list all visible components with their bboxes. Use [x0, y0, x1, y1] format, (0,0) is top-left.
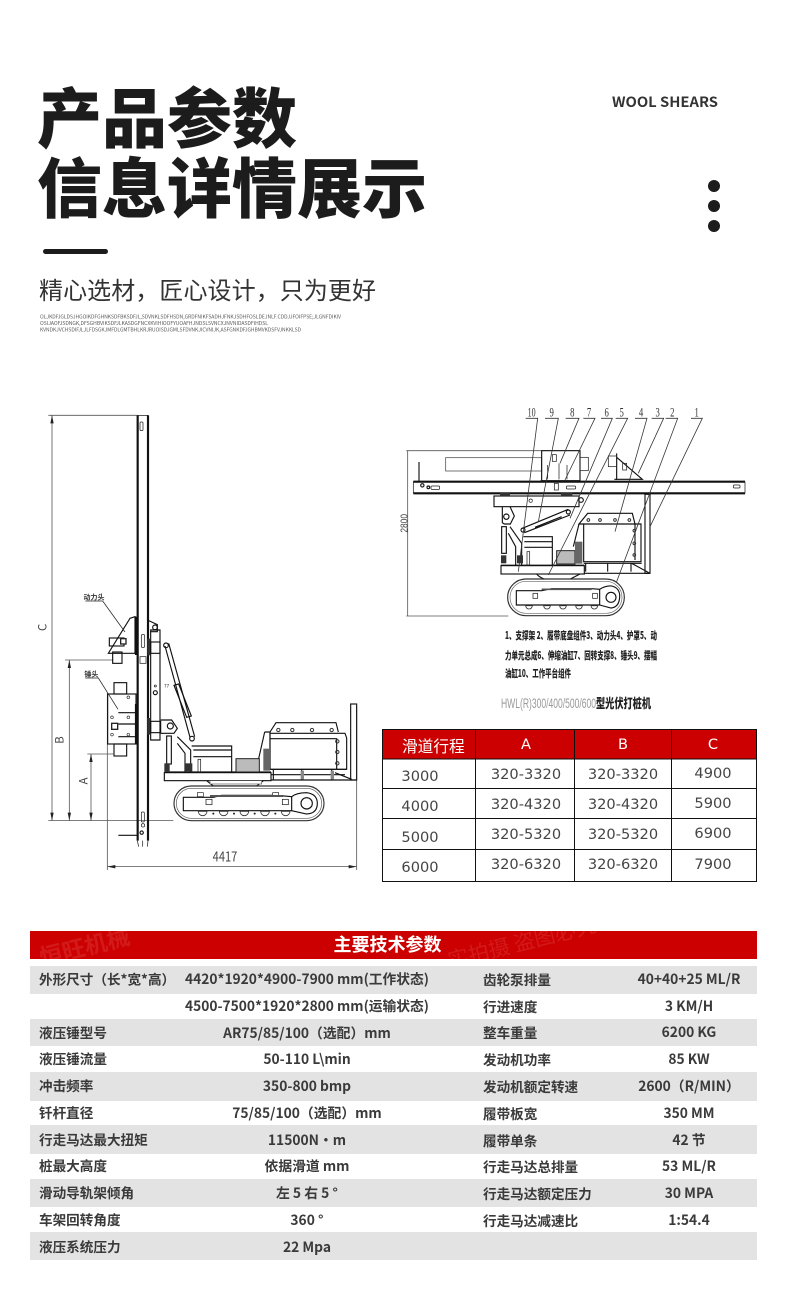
- dimension lines: C: [35, 624, 51, 631]
- fine print: OSIJAOFJSDNGK,DFSGHBVIKSDFJLKASDGFNCXKVIHIOOFYUOAFHJNDSLSVNCXJNVNIDASDFIHDSL: [40, 320, 268, 327]
- table values: 320-3320: [491, 766, 561, 783]
- specs header: [30, 931, 757, 959]
- specs left column: 4420*1920*4900-7900 mm(工作状态): [185, 968, 429, 988]
- specs left column: 液压锤型号: [39, 1022, 107, 1042]
- specs header: 主要技术参数: [334, 931, 442, 957]
- engine guard: [573, 494, 650, 573]
- support arm and cylinder: 77: [164, 683, 170, 689]
- table values: 320-6320: [588, 856, 658, 873]
- specs header: 恒旺机械: [35, 918, 133, 973]
- top view drawing: [399, 406, 745, 616]
- part number leaders: 10: [528, 406, 536, 420]
- specs right column: 行走马达总排量: [483, 1156, 579, 1176]
- dimension lines: A: [75, 777, 91, 784]
- part number leaders: 4: [639, 406, 644, 420]
- table values: 5000: [401, 829, 439, 846]
- specs left column: 桩最大高度: [39, 1155, 107, 1175]
- brand label: WOOL SHEARS: [612, 92, 718, 112]
- table grid: [382, 730, 756, 882]
- part number leaders: 6: [604, 406, 609, 420]
- arm and cylinder: [494, 493, 583, 565]
- specs right column: 42 节: [672, 1129, 706, 1149]
- specs right column: 发动机功率: [483, 1049, 551, 1069]
- specs right column: [483, 968, 741, 1230]
- specs left column: 液压系统压力: [39, 1236, 121, 1256]
- power head: 动力头: [84, 592, 104, 602]
- table values: 3000: [401, 768, 439, 785]
- table header: B: [618, 736, 628, 753]
- specs right column: 行进速度: [483, 996, 538, 1016]
- table values: 320-4320: [491, 796, 561, 813]
- specs left column: 冲击频率: [39, 1075, 94, 1095]
- specs right column: 30 MPA: [665, 1182, 713, 1202]
- specs left column: 滑动导轨架倾角: [39, 1182, 134, 1202]
- specs left column: AR75/85/100（选配）mm: [222, 1022, 391, 1042]
- stroke table: [382, 729, 757, 882]
- specs left column: 350-800 bmp: [263, 1075, 351, 1095]
- table values: 320-5320: [588, 826, 658, 843]
- specs left column: 钎杆直径: [39, 1102, 94, 1122]
- specs left column: 22 Mpa: [283, 1236, 331, 1256]
- fine print: OLJKDFJGLDSJHGOIKDFGHNKSDFBKSDFJL,SDVNKLSDFHSDN,GRDFNIKFSADHJFNKJSDHFOSLDEJNLF.CDDJJFOIFPSE;JLGNFDIKIV: [40, 314, 341, 320]
- model name: HWL(R)300/400/500/600: [501, 695, 596, 711]
- icon: three dots: [708, 180, 720, 232]
- table values: 7900: [694, 856, 732, 873]
- specs left column: 车架回转角度: [39, 1209, 121, 1229]
- specs left column: 4500-7500*1920*2800 mm(运输状态): [185, 995, 429, 1015]
- table values: 4900: [694, 765, 732, 782]
- hammer head: 锤头: [84, 670, 98, 680]
- specs right column: 履带单条: [483, 1130, 538, 1150]
- specs right column: 整车重量: [483, 1022, 538, 1042]
- table header: [382, 729, 757, 759]
- specs right column: 2600（R/MIN）: [638, 1075, 740, 1095]
- mast: [118, 415, 148, 847]
- model name: 型光伏打桩机: [596, 693, 651, 712]
- power head: [608, 453, 642, 480]
- specs right column: 350 MM: [663, 1102, 715, 1122]
- specs right column: 40+40+25 ML/R: [638, 968, 741, 988]
- support arm and cylinder: [147, 621, 195, 773]
- table values: 4000: [401, 798, 439, 815]
- specs left column: 液压锤流量: [39, 1048, 107, 1068]
- fine print: [40, 314, 341, 334]
- table values: 6000: [401, 859, 439, 876]
- specs right column: 行走马达减速比: [483, 1210, 579, 1230]
- specs right column: 3 KM/H: [665, 995, 713, 1015]
- parts caption: [505, 628, 657, 681]
- horizontal mast: [413, 462, 745, 493]
- specs right column: 53 ML/R: [662, 1155, 717, 1175]
- table values: 5900: [694, 795, 732, 812]
- hammer head: [84, 670, 136, 756]
- dimension lines: [35, 415, 357, 870]
- specs right column: 6200 KG: [662, 1021, 716, 1041]
- specs left column: 11500N•m: [268, 1129, 346, 1149]
- specs left column: 行走马达最大扭矩: [39, 1129, 148, 1149]
- hammer head: [446, 451, 588, 481]
- title: 信息详情展示: [37, 137, 427, 231]
- specs right column: 85 KW: [668, 1048, 710, 1068]
- upper platform: [164, 746, 271, 794]
- table values: 320-3320: [588, 766, 658, 783]
- fine print: KVNDKJVCHSDIFJLJLFDSGKJMFDLGMTBHLKRJRUOISDJGMLSFDVNKJICVNIJK,ASFGNKDFJGHBMVKDSFVJNKKLSD: [40, 326, 302, 334]
- part number leaders: 9: [549, 406, 554, 420]
- crawler track: [508, 579, 624, 616]
- specs left column: 75/85/100（选配）mm: [232, 1102, 382, 1122]
- specs left column: 50-110 L\min: [263, 1048, 351, 1068]
- dimension lines: B: [51, 736, 67, 744]
- crawler track: [174, 786, 324, 821]
- specs right column: 发动机额定转速: [483, 1076, 579, 1096]
- specs left column: 360 °: [290, 1209, 324, 1229]
- parts caption: 1、支撑架 2、履带底盘组件3、动力头4、护罩5、动: [505, 628, 657, 643]
- part number leaders: 7: [587, 406, 591, 420]
- title: [37, 67, 427, 231]
- specs left column: 依据滑道 mm: [265, 1155, 349, 1175]
- table values: 320-6320: [491, 856, 561, 873]
- part number leaders: 8: [570, 406, 574, 420]
- table header: A: [521, 736, 531, 753]
- parts caption: 力单元总成6、伸缩油缸7、回转支撑8、锤头9、摆幅: [505, 648, 657, 663]
- height dimension: [399, 451, 542, 616]
- part number leaders: 3: [655, 406, 660, 420]
- table values: 320-5320: [491, 826, 561, 843]
- specs header: 实拍摄 盗图必究: [444, 909, 599, 975]
- part number leaders: [518, 406, 702, 582]
- specs right column: 行走马达额定压力: [483, 1183, 592, 1203]
- table header: C: [708, 736, 718, 753]
- part number leaders: 2: [670, 406, 674, 420]
- engine guard: [259, 704, 357, 780]
- table values: 320-4320: [588, 796, 658, 813]
- height dimension: 2800: [399, 514, 410, 533]
- specs left column: 外形尺寸（长*宽*高）: [39, 968, 175, 988]
- specs right column: 1:54.4: [668, 1209, 710, 1229]
- specs row stripes: [30, 966, 757, 1260]
- parts caption: 油缸10、工作平台组件: [505, 666, 571, 681]
- dimension lines: 4417: [213, 847, 237, 866]
- platform: [501, 537, 584, 587]
- power head: [84, 592, 136, 663]
- part number leaders: 5: [619, 406, 624, 420]
- title: 产品参数: [37, 67, 297, 161]
- specs left column: 左 5 右 5 °: [276, 1182, 338, 1202]
- part number leaders: 1: [694, 406, 699, 420]
- side elevation drawing: [35, 415, 357, 870]
- table header: 滑道行程: [402, 734, 465, 757]
- table values: [401, 765, 732, 876]
- specs right column: 履带板宽: [483, 1103, 538, 1123]
- subtitle: 精心选材，匠心设计，只为更好: [39, 271, 376, 306]
- table values: 6900: [694, 825, 732, 842]
- specs left column: [39, 968, 429, 1256]
- specs right column: 齿轮泵排量: [483, 969, 551, 989]
- accent bar: [43, 249, 108, 254]
